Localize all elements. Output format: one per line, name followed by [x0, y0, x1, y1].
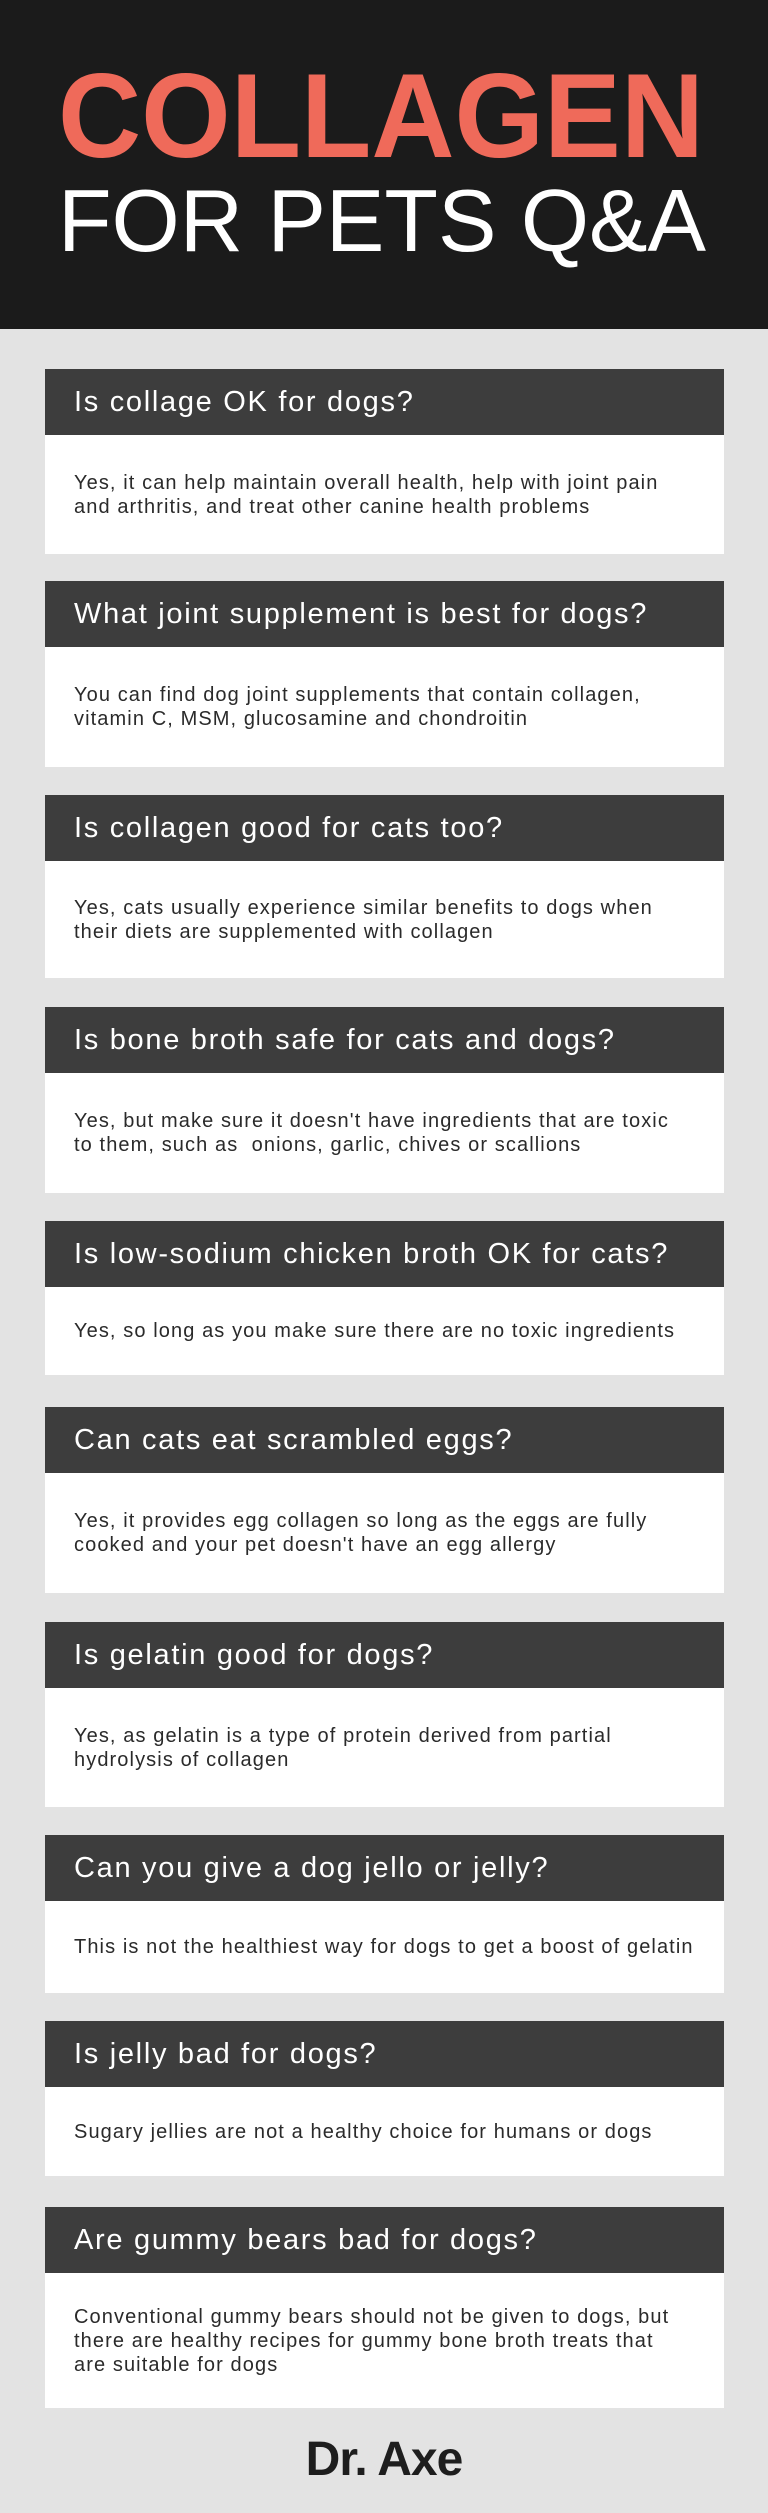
card 1: Yes, it can help maintain overall health, help with joint pain: [74, 472, 658, 494]
card 4: Is bone broth safe for cats and dogs?: [74, 1024, 616, 1056]
card 6: cooked and your pet doesn't have an egg allergy: [74, 1534, 556, 1556]
card 2: You can find dog joint supplements that contain collagen,: [74, 684, 641, 706]
card 6: [45, 1407, 724, 1593]
card 5: Yes, so long as you make sure there are no toxic ingredients: [74, 1320, 675, 1342]
card 2: What joint supplement is best for dogs?: [74, 598, 648, 630]
card 10: [45, 2207, 724, 2408]
card 9: Sugary jellies are not a healthy choice for humans or dogs: [74, 2120, 653, 2142]
header banner: [0, 0, 768, 329]
card 6: Yes, it provides egg collagen so long as the eggs are fully: [74, 1510, 647, 1532]
card 3: Yes, cats usually experience similar benefits to dogs when: [74, 896, 653, 918]
card 5: [45, 1221, 724, 1375]
card 3: Is collagen good for cats too?: [74, 812, 504, 844]
card 7: Yes, as gelatin is a type of protein derived from partial: [74, 1724, 612, 1746]
card 10: Are gummy bears bad for dogs?: [74, 2224, 538, 2256]
title: COLLAGEN: [58, 49, 704, 183]
card 3: their diets are supplemented with collagen: [74, 920, 494, 942]
card 2: vitamin C, MSM, glucosamine and chondroitin: [74, 708, 528, 730]
card 9: Is jelly bad for dogs?: [74, 2038, 377, 2070]
card 10: there are healthy recipes for gummy bone broth treats that: [74, 2330, 654, 2352]
card 6: Can cats eat scrambled eggs?: [74, 1424, 513, 1456]
card 4: [45, 1007, 724, 1193]
card 1: [45, 369, 724, 554]
card 7: [45, 1622, 724, 1807]
logo: Dr. Axe: [306, 2433, 462, 2486]
card 4: to them, such as onions, garlic, chives or scallions: [74, 1134, 581, 1156]
card 1: and arthritis, and treat other canine health problems: [74, 496, 590, 518]
card 5: Is low-sodium chicken broth OK for cats?: [74, 1238, 669, 1270]
card 3: [45, 795, 724, 978]
title: FOR PETS Q&A: [58, 171, 706, 270]
card 8: This is not the healthiest way for dogs to get a boost of gelatin: [74, 1936, 694, 1958]
card 1: Is collage OK for dogs?: [74, 386, 415, 418]
card 7: Is gelatin good for dogs?: [74, 1639, 434, 1671]
card 7: hydrolysis of collagen: [74, 1748, 289, 1770]
card 9: [45, 2021, 724, 2176]
card 8: Can you give a dog jello or jelly?: [74, 1852, 549, 1884]
card 10: are suitable for dogs: [74, 2354, 278, 2376]
card 10: Conventional gummy bears should not be given to dogs, but: [74, 2306, 669, 2328]
card 4: Yes, but make sure it doesn't have ingredients that are toxic: [74, 1110, 669, 1132]
title: [58, 49, 706, 270]
card 2: [45, 581, 724, 767]
card 8: [45, 1835, 724, 1993]
